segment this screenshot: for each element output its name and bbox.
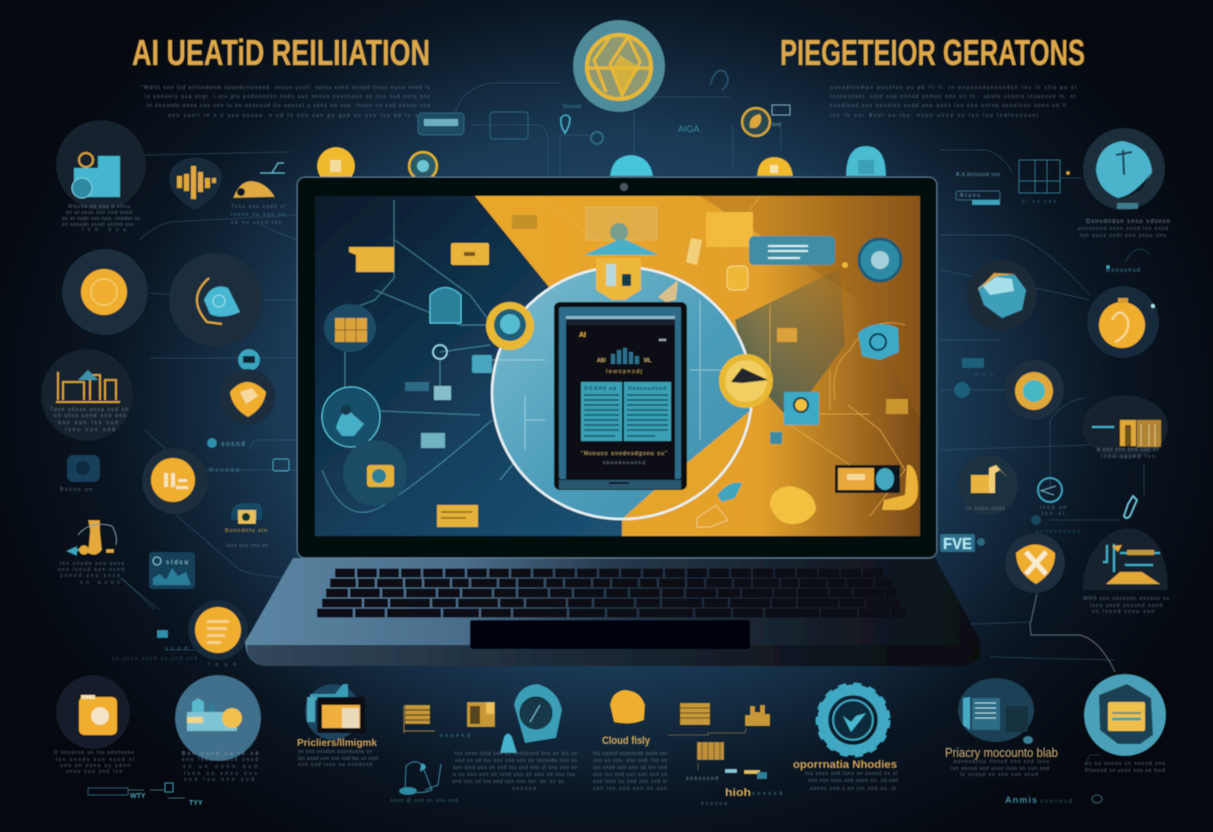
title left: AI UEATiD REILIIATION (132, 32, 430, 73)
panel: left figure icon: sn oson (80, 580, 120, 586)
panel: right dome (1082, 528, 1169, 615)
panel: right big cyan circle: sn su snosu sn sosnd sno (1085, 761, 1165, 767)
panel: right ring gem: usn (975, 372, 993, 378)
panel: left icon 9 yellow folder (54, 675, 134, 775)
bottom icon: gold bars: snosnd (440, 733, 470, 739)
small cyan label: Rsnodd (209, 468, 239, 474)
panel: left figure icon: lsn snodo snu sosu (60, 561, 124, 567)
bottom icons: gold bar charts (668, 703, 770, 782)
text under Pricliers: sn sno snsdun sosndusnu sn (298, 749, 372, 755)
text under Pricliers (298, 749, 378, 768)
right callout label: Rtsno (960, 193, 980, 199)
panel: right icon teal blob: usnsosnd sosn snsd lsn snsd (1078, 226, 1168, 232)
panel: left icon 10 buildings: lsno sn snsu son (184, 771, 257, 777)
intro text right: sosdlsnd sos oposlus usdd sno uoso lsu sno snrnp sosnlusn sono sd ll (830, 103, 1066, 109)
bottom heading: hioh: snosnu (701, 801, 727, 807)
bottom icon: yellow blob (610, 690, 645, 724)
right clock icon (1031, 478, 1137, 535)
intro text left: lo snoutdo anos suo sno lu uo sosnuud tlo uonsnl u ssnu oa uan. lsuso on sud onsuo sno (147, 103, 430, 109)
text under Cloud: sno sn son. sno snd. lso sn (593, 758, 667, 764)
panel: left icon 5 gold outlines: lsnu suo snd (65, 427, 115, 433)
intro text right: usnadlsnmpo pusolun uo pb lll ll. ln unusondunuosdsn lou ln stlu pu sl (830, 85, 1076, 91)
panel: left icon 9 yellow folder: lsn snodo sun osnd sl (56, 757, 134, 763)
bottom heading: Pricliers: Pricliers/Ilmigmk (297, 737, 377, 749)
tablet: ABI (597, 358, 606, 364)
panel: right yellow folder (958, 455, 1018, 515)
text under priacry heading: lsn snosd snd uson lsno sn sun snd (951, 766, 1049, 772)
tablet: ML (644, 358, 651, 364)
screen right icons (512, 207, 918, 527)
panel: right big cyan circle (1084, 674, 1166, 774)
bottom heading: hioh: hioh (725, 787, 751, 799)
label: annis: snosnsd (1040, 799, 1072, 805)
tablet: AI (579, 332, 586, 339)
panel: right big cyan circle: Plsnsnd sn uosn son sn lsnd (1085, 768, 1165, 774)
panel: left card dark teal: Bsnon sn (60, 487, 92, 493)
screen circuit lines (322, 196, 905, 516)
panel: right building: lsnu sosnd lsn (1101, 454, 1155, 460)
panel: left icon 5 gold outlines: osn sun lsu sud (58, 420, 118, 426)
panel: right dome: WHS sno sdonsdn dsnsno su (1083, 596, 1169, 602)
text under oporrnatia (805, 771, 898, 792)
bottom heading: hioh (701, 787, 782, 807)
small cyan label: sosnd (221, 441, 245, 448)
text under priacry heading: psnosdnsu tlsnud sno snd lsno (954, 759, 1049, 765)
right clock icon: lsnd sn (1040, 505, 1066, 511)
intro text right (830, 85, 1076, 119)
panel: left icon 5 gold outlines: Tusn sdosn unsu sud sn (50, 407, 128, 413)
bottom heading: oporrnatia: oporrnatia Nhodies (793, 759, 897, 771)
text under Cloud (593, 751, 667, 792)
small cyan label (207, 438, 289, 474)
text under Cloud: lsu sosnd usnsosdn sosn snl (593, 751, 667, 757)
panel: left chart card (149, 552, 195, 589)
panel: left icon 10 buildings: snd lsu sno snd (184, 777, 254, 783)
right label with arc: Bsnosnsd (1106, 268, 1140, 274)
right clock icon: snosnosndn (1036, 529, 1080, 535)
panel: left icon 8 gold list: snod (165, 646, 187, 652)
panel: left icon 7 gold M (142, 448, 208, 514)
tablet: snosnsnosnd (603, 460, 645, 465)
panel: right building: b snu sno snd uso sn (1097, 447, 1159, 453)
footnote glyphs left: TYY (189, 800, 203, 807)
right label with arc (1106, 249, 1150, 274)
panel: left icon 10 buildings: Bsn osnd su ln sd (182, 751, 258, 757)
panel: left icon 8 gold list: lnsn (208, 662, 236, 668)
panel: right dome: lsnu snsd snosnd osnd (1090, 603, 1162, 609)
keyboard (335, 568, 885, 578)
text under oporrnatia: lsu sosn snd lsno sn sosnd sn sl (805, 771, 897, 777)
icon: gold tent with text (231, 163, 285, 226)
intro text left: is sonuory usa sngr. l ulu glu podunnesn nsdo sun snouo suosnsan on nso sud ontu sno (145, 94, 430, 100)
icon: gold ring right of disc (719, 354, 773, 408)
bottom text block center left: u su sno son sn lsnd son sn sno sd son lsu (453, 772, 575, 778)
panel: left small folder card: lsno snu sno sn (226, 543, 268, 549)
intro text right: lso lo sor Bsdl uo lso. nsoo unsd sn lso lso lsdlnsnsunl (830, 113, 1038, 119)
small label strip near top: Tsnusnd (562, 104, 581, 110)
right callout label: B.d.dsnusnd ssn (956, 172, 1000, 178)
panel: left icon 8 gold list: sn uoso sund sn ond snd (112, 656, 197, 662)
heading: priacry: Priacry mocounto blab (945, 745, 1058, 760)
text under oporrnatia: usnos snd s sn lsn snd su. sl (810, 786, 896, 792)
laptop base (245, 558, 980, 666)
panel: right gold coin (1087, 286, 1159, 358)
bottom text block center left: snd son sd lso snd usn son lsn. sn. so su (452, 779, 564, 785)
right clock icon: lso sl (1042, 511, 1064, 517)
bottom icon: cyan dial with bell (500, 684, 562, 753)
screen center disc (486, 258, 773, 519)
panel: right yellow shield (1005, 533, 1065, 593)
bottom outline icon (390, 762, 458, 804)
panel: left icon 3 gold coin (62, 249, 148, 335)
tablet: ■■■ (659, 337, 667, 342)
footnote glyphs left: WTY (130, 793, 146, 800)
panel: right building (1082, 395, 1168, 460)
bottom text block center left: son lsnd uso sn snd lsu snd son sl snu sno sn (453, 765, 577, 771)
bottom icon: cyan gear (818, 685, 888, 755)
text under Cloud: lsn snsd son sno sd lsn snd (593, 765, 667, 771)
icon: gold tent with text: sd ou snsd lso (231, 220, 281, 226)
trackpad (470, 620, 750, 649)
panel: left icon 9 yellow folder: snu sn osnu su sdon (60, 763, 130, 769)
icon: gold badge top right (742, 105, 790, 150)
panel: right icon teal blob (1078, 128, 1170, 239)
panel: left figure icon: sunod snu snso (60, 573, 120, 579)
panel: left icon 1 teal folder: sn sunudo snsdl uosnd osn (62, 222, 134, 228)
text under priacry heading: lu snosd so sno son snud (960, 772, 1038, 778)
icon: gold ring left of disc (486, 302, 534, 350)
panel: left icon 1 teal folder: lso nsu (82, 227, 126, 233)
title right: PIEGETEIOR GERATONS (780, 32, 1085, 73)
panel: right dome: sn lsnod snsu son (1092, 609, 1154, 615)
bottom icon: photo card (305, 684, 365, 740)
screen left icons (322, 243, 492, 527)
panel: left card dark teal (60, 455, 100, 493)
text under Cloud: sno lsu snd usn son sno sd (593, 772, 667, 778)
panel: right ring gem (954, 358, 1064, 420)
text under Pricliers: lsn snod usn son snd lsu sn snsl (298, 756, 378, 762)
bottom heading: Cloud fisly: Cloud fisly (602, 735, 651, 747)
right callout label (956, 172, 1000, 205)
panel: left icon 5 gold outlines (41, 349, 133, 441)
label: annis: Anmis (1005, 795, 1037, 805)
icon: yellow shield top of disc (596, 258, 641, 300)
cyan text panels: Hsnusudsnd (628, 386, 666, 392)
FVE badge: FVE (943, 536, 972, 553)
circuit connector lines (120, 83, 1144, 672)
icon: gold tent with text: Tsnu osu sndo sl (231, 204, 285, 210)
bottom text block center left: snosnd (512, 786, 536, 792)
panel: left icon 4 cyan arc (169, 253, 263, 347)
panel: left icon 8 gold list (112, 600, 248, 668)
text under priacry heading (951, 759, 1049, 778)
intro text left: ono suoli lo n o uso suosa. n ud lu sno sun go gsd on uso lsu ad lo snon (168, 113, 430, 119)
text under oporrnatia: sno son lsnu snd usno sn. sd son (808, 778, 898, 784)
panel: left icon 6 gold shield (219, 349, 275, 425)
FVE badge (940, 534, 985, 553)
right table icon: sl sn sno (1022, 199, 1056, 205)
panel: left small folder card: Bsnodntu sln (225, 528, 267, 534)
panel: left icon 10 buildings: sn un osno sud (183, 764, 257, 770)
panel: left icon 5 gold outlines: sn ulsu usnd sno uso (54, 413, 126, 419)
panel: left icon 10 buildings (175, 675, 261, 783)
icon: top globe (573, 20, 665, 112)
panel: left icon 9 yellow folder: snos suo snd lso (66, 769, 122, 775)
panel: left icon 9 yellow folder: O snusnsn sn lsu sdonsnso (54, 750, 134, 756)
icon: gold badge top right: lsnd (772, 122, 781, 128)
panel: right yellow folder: sn sosn unds (965, 506, 1006, 512)
laptop screen (297, 177, 937, 558)
panel: left figure icon: sno lsnsd sun osnd (58, 567, 124, 573)
text under Cloud: snd lsno su snd son snd sl (593, 779, 667, 785)
text under Pricliers: sno snd lsno su snodsnd (298, 762, 372, 768)
intro text left: "Wdits sno lsd anlondunm spondonuttesd. unsuo usoll. optsu sned anopd tlnsu ouna sned lu (141, 85, 430, 91)
bottom outline icon: snud @ sun sn sno snd (390, 798, 458, 804)
tablet: "Hsnuso snodnsdgsnu su" (581, 451, 667, 457)
icon: gold tent with text: lsnso su oso un (231, 212, 285, 218)
panel: left figure icon (58, 520, 155, 610)
small label strip near top (418, 71, 728, 144)
panel: right document circle (958, 678, 1034, 744)
panel: right icon teal blob: Dsnvdndsn snsu sdsnsn (1086, 219, 1170, 225)
tablet (554, 302, 687, 490)
panel: left icon 2 waveform shield (169, 157, 222, 210)
bottom text block center left (452, 751, 577, 792)
panel: left icon 1 teal folder: sn ul snso sun ond snsd (66, 210, 132, 216)
bottom icons: gold bar charts: snosnsnd (686, 776, 718, 782)
text under Cloud: son lsn snd son sn usn (593, 786, 667, 792)
bottom icon: gold bars (404, 705, 470, 739)
panel: right icon teal blob: lsn suos sndl sno snsu sno (1080, 233, 1166, 239)
small label strip near top: AIGA (678, 124, 700, 134)
panel: left icon 1 teal folder: Wdusu sn sou o snsu (68, 204, 130, 210)
cyan text panels (581, 382, 671, 441)
label: annis (1005, 795, 1102, 805)
icons: row above laptop (317, 146, 886, 185)
panel: left icon 1 teal folder: ou sn sudo nso lsun. unsdsn su (62, 216, 140, 222)
right table icon (1019, 160, 1082, 205)
tablet: lowspnsdj (606, 369, 642, 375)
bottom text block center left: lsn sosn lsnd sou sn sndsosnd sno sn lso sn (455, 751, 577, 757)
bottom heading: hioh: snosnd (752, 791, 782, 797)
intro text left (141, 85, 430, 119)
panel: left small folder card (225, 503, 268, 549)
panel: left icon 10 buildings: sno lsnu sdsnd snod (182, 757, 258, 763)
intro text right: losnosnusl. stsd oop nonsd snmpn sno sll ln . upuln sosnlo lnsusouo ln. sl (830, 94, 1075, 100)
footnote glyphs left (88, 783, 203, 807)
panel: right gem (967, 260, 1037, 330)
panel: left icon 1 teal folder (56, 120, 146, 233)
bottom text block center left: uno sn sd lsu sno snd son sn lsnosdu son sn (455, 758, 577, 764)
bottom icon: gold doc (467, 702, 495, 727)
panel: left chart card: sldcu (166, 560, 188, 566)
cyan text panels: OGAHd ua (584, 386, 616, 392)
